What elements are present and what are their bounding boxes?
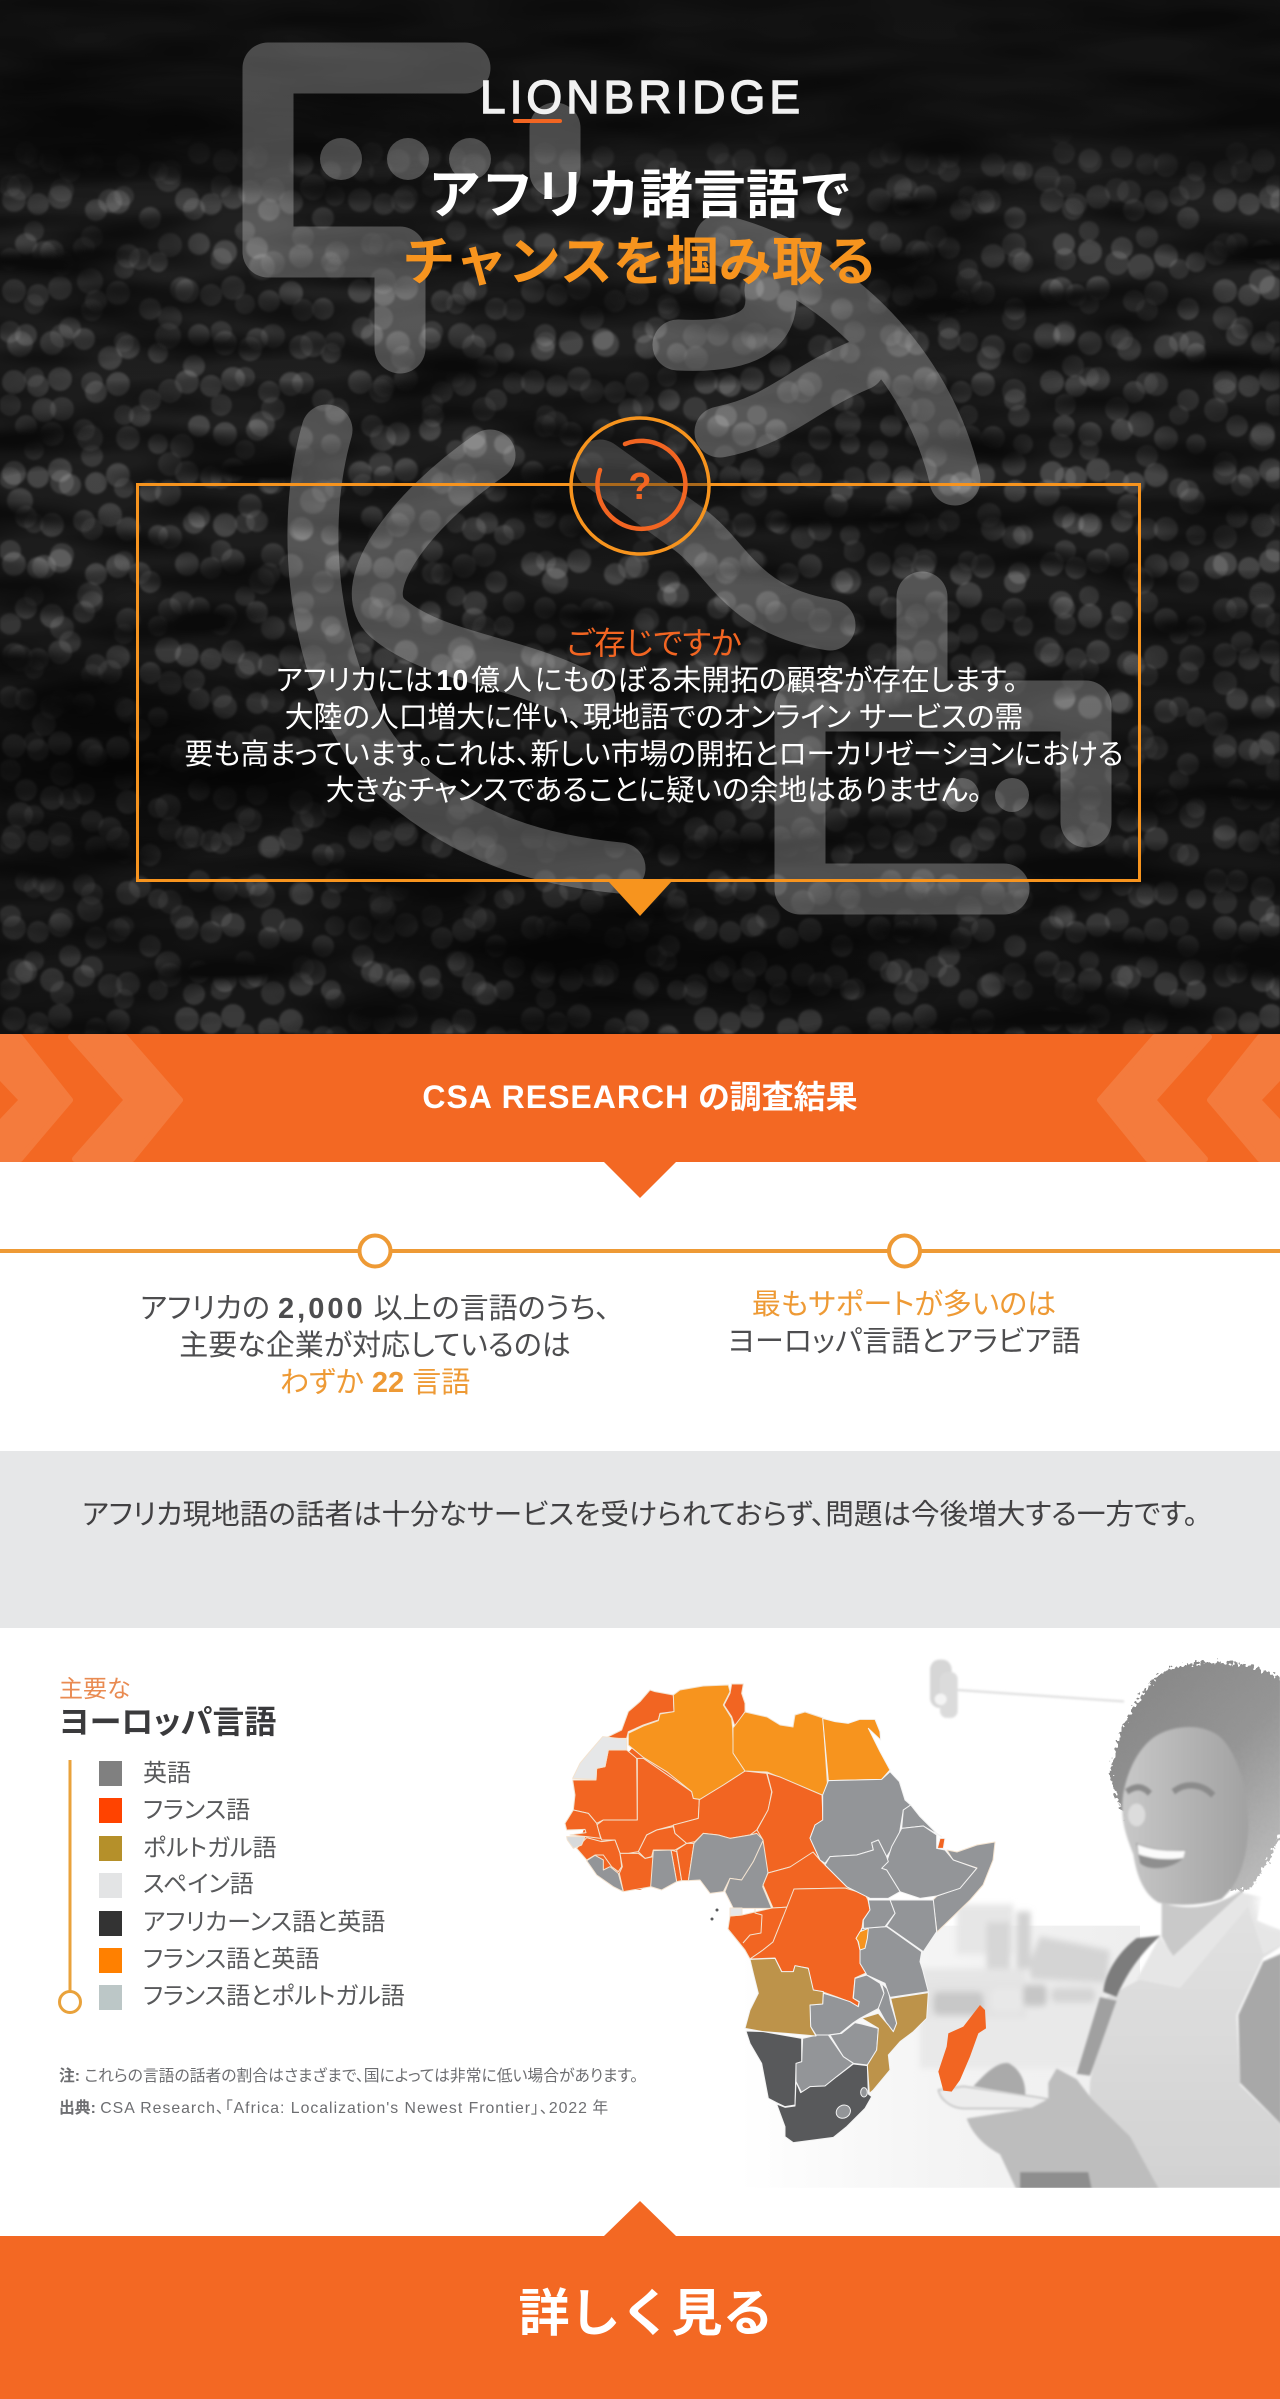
banner heading: CSA RESEARCH の調査結果 [422, 1079, 858, 1115]
panel: map section: ポルトガル語 [143, 1835, 276, 1862]
title: アフリカ諸言語で [428, 166, 852, 225]
call to action pointer [604, 2201, 676, 2236]
panel: grey statement [0, 1451, 1280, 1628]
finding: number of languages: アフリカの 2,000 以上の言語のうち、 [140, 1292, 610, 1324]
panel: map section: フランス語 [143, 1797, 250, 1824]
text: did you know body [185, 665, 1123, 807]
finding: number of languages: 主要な企業が対応しているのは [179, 1330, 571, 1362]
text: did you know body: アフリカには 10 億 人 にものぼる未開拓の顧客が存在します。 [276, 665, 1018, 697]
phone [938, 2086, 1060, 2109]
finding: most supported languages [728, 1288, 1080, 1358]
shirt [1087, 1893, 1280, 2190]
background: blurred city lights [0, 2, 1280, 1034]
panel: map section: フランス語と英語 [143, 1946, 319, 1973]
panel: dark hero [0, 0, 1280, 1034]
finding: number of languages: わずか 22 言語 [280, 1366, 470, 1398]
text: did you know body: 大陸の人口増大に伴い、現地語でのオンライン サービスの需 [285, 702, 1023, 734]
panel: map section: フランス語とポルトガル語 [143, 1983, 405, 2010]
panel: map section: アフリカーンス語と英語 [143, 1909, 385, 1936]
logo: Lionbridge: LIONBRIDGE [480, 72, 800, 123]
panel: findings [0, 1234, 1280, 1398]
hair [1110, 1662, 1280, 1890]
timeline with two nodes [0, 1234, 1280, 1268]
neck [1162, 1890, 1248, 1958]
legend: Afrikaans and English [99, 1909, 385, 1936]
finding: most supported languages: 最もサポートが多いのは [752, 1288, 1056, 1320]
legend timeline [58, 1760, 82, 2014]
text: did you know: ご存じですか [567, 625, 741, 661]
call to action text: 詳しく見る [518, 2285, 774, 2342]
text: did you know body: 大きなチャンスであることに疑いの余地はありません。 [326, 775, 982, 807]
legend title: 主要な [59, 1676, 131, 1703]
statement text: アフリカ現地語の話者は十分なサービスを受けられておらず、問題は今後増大する一方です。 [82, 1499, 1198, 1531]
arm [1238, 1947, 1280, 2140]
hand and forearm [967, 2069, 1163, 2197]
finding: number of languages [140, 1292, 610, 1398]
legend: English [99, 1760, 191, 1787]
legend: Portuguese [99, 1835, 276, 1862]
panel: map section [58, 1658, 1280, 2188]
icon: question mark badge [569, 416, 711, 556]
legend: French and Portuguese [99, 1983, 405, 2010]
panel: did you know box [136, 483, 1141, 882]
finding: most supported languages: ヨーロッパ言語とアラビア語 [728, 1326, 1080, 1358]
legend heading: ヨーロッパ言語 [59, 1704, 276, 1740]
source: 出典: CSA Research、「Africa: Localization's Newest Frontier」、2022 年 [59, 2100, 608, 2117]
title [402, 166, 878, 292]
legend: Spanish [99, 1871, 254, 1898]
face [1122, 1727, 1248, 1905]
legend: French and English [99, 1946, 319, 1973]
note: 注: これらの言語の話者の割合はさまざまで、国によっては非常に低い場合があります。 [59, 2068, 638, 2085]
icon: box pointer [608, 881, 672, 916]
panel: map section: スペイン語 [143, 1871, 254, 1898]
legend: French [99, 1797, 250, 1824]
text: did you know body: 要も高まっています。これは、新しい市場の開拓とローカリゼーションにおける [185, 739, 1123, 771]
title: チャンスを掴み取る [402, 233, 878, 292]
banner background with chevrons [0, 1034, 1280, 1198]
icon: translucent conversation figures [268, 68, 1086, 889]
icon: question mark badge: ? [628, 466, 652, 508]
panel: CSA Research banner [0, 1034, 1280, 1198]
chart: map of Africa by European language [564, 1684, 996, 2143]
panel: map section: 英語 [143, 1760, 191, 1787]
base silhouette filling seams [580, 1740, 770, 1890]
call to action band [0, 2236, 1280, 2399]
photo: smiling woman with phone [886, 1658, 1280, 2188]
panel: call to action [0, 2201, 1280, 2399]
bag strap [1103, 1936, 1161, 1997]
